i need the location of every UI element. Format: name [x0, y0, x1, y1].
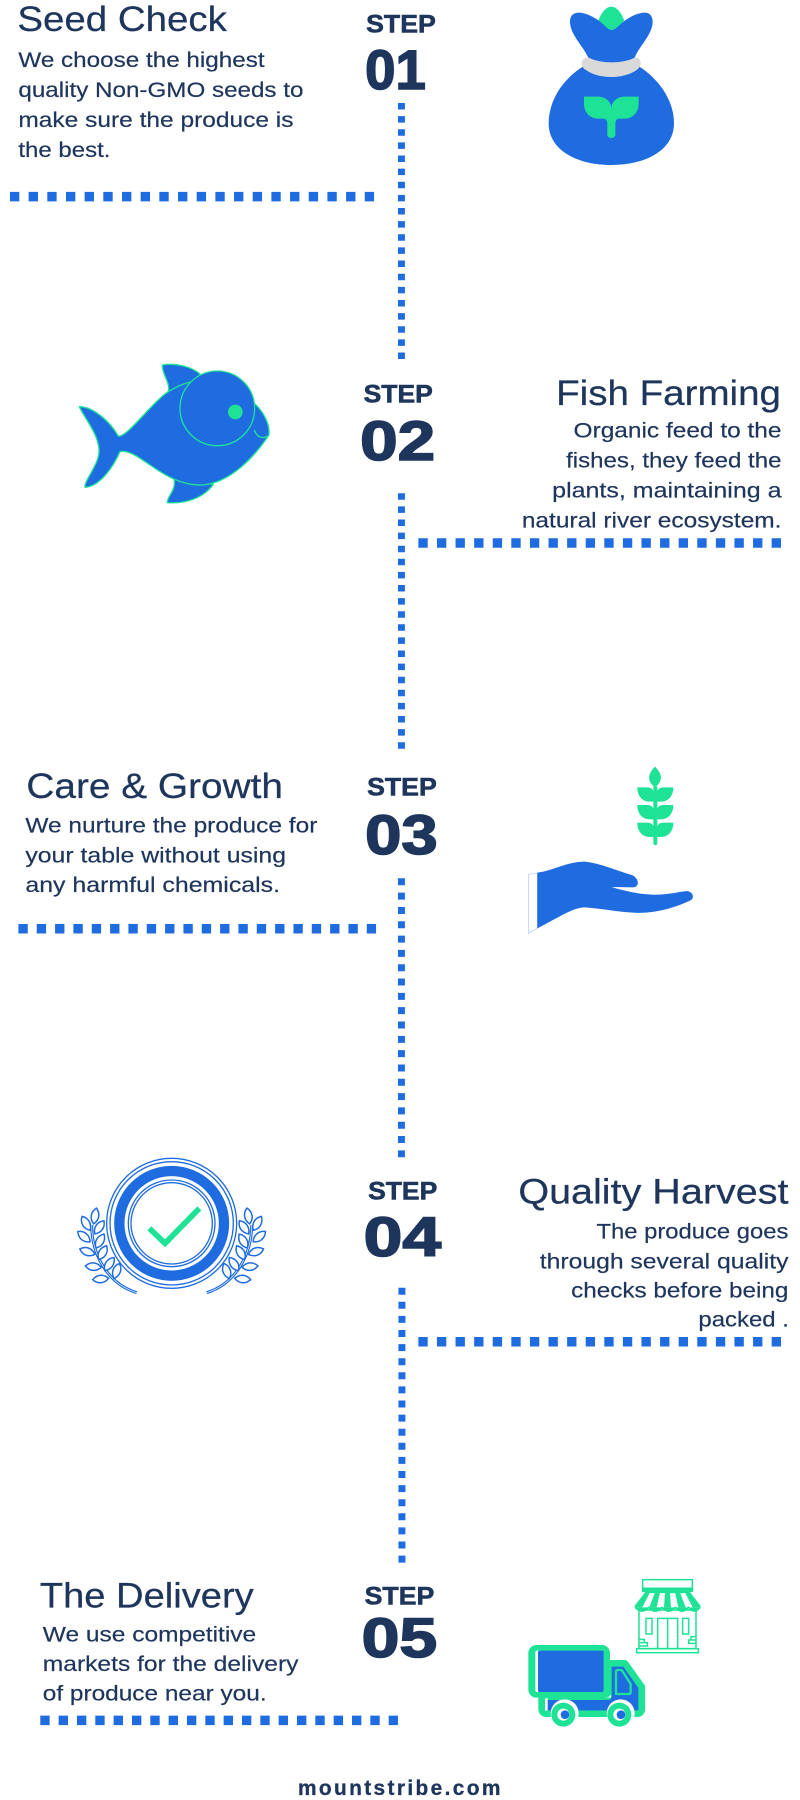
- text block: care and growth description: any harmful chemicals.: [25, 873, 280, 897]
- text block: care and growth description: your table without using: [25, 844, 286, 868]
- text block: care and growth description: We nurture the produce for: [25, 814, 317, 838]
- text block: care and growth description: [25, 814, 317, 897]
- text block: delivery description: We use competitive: [43, 1623, 256, 1647]
- truck: [542, 1663, 642, 1714]
- step label 03: STEP: [367, 773, 437, 801]
- footer: website: mountstribe.com: [298, 1777, 500, 1800]
- text block: seed check description: [18, 48, 304, 162]
- panel: step 1 seed check: [10, 0, 674, 359]
- panel: step 2 fish farming: [79, 364, 782, 749]
- text block: fish farming description: Organic feed to the: [574, 419, 781, 443]
- step label 02: STEP: [364, 381, 433, 409]
- vertical dotted connector 2: [398, 493, 405, 749]
- text block: quality harvest description: [540, 1219, 789, 1332]
- step label 01: STEP: [366, 10, 436, 39]
- text block: seed check description: quality Non-GMO seeds to: [18, 78, 304, 102]
- horizontal dotted rule under seed check: [10, 192, 374, 201]
- heading: Seed Check: Seed Check: [17, 0, 227, 39]
- step label 04: 04: [364, 1205, 441, 1268]
- heading: Care & Growth: Care & Growth: [26, 767, 283, 806]
- panel: step 5 the delivery: [40, 1577, 700, 1727]
- text block: seed check description: the best.: [18, 138, 110, 162]
- icon: delivery truck and storefront: [528, 1580, 700, 1727]
- step label 05: [362, 1583, 437, 1669]
- heading: Quality Harvest: Quality Harvest: [518, 1172, 789, 1211]
- text block: fish farming description: plants, maintaining a: [552, 479, 782, 503]
- panel: step 4 quality harvest: [75, 1158, 789, 1563]
- step label 05: 05: [362, 1606, 437, 1669]
- right laurel: [207, 1207, 268, 1293]
- step label 04: STEP: [368, 1177, 437, 1205]
- text block: quality harvest description: through several quality: [540, 1249, 789, 1273]
- text block: fish farming description: natural river ecosystem.: [522, 509, 781, 533]
- text block: quality harvest description: The produce goes: [596, 1219, 788, 1243]
- text block: quality harvest description: checks before being: [571, 1279, 788, 1303]
- text block: fish farming description: [522, 419, 782, 533]
- text block: quality harvest description: packed .: [698, 1308, 789, 1332]
- text block: seed check description: make sure the produce is: [18, 108, 293, 132]
- step label 05: STEP: [365, 1583, 434, 1611]
- vertical dotted connector 4: [398, 1288, 405, 1563]
- text block: seed check description: We choose the highest: [18, 48, 265, 72]
- text block: delivery description: [43, 1623, 299, 1706]
- step label 04: [364, 1177, 441, 1268]
- panel: step 3 care and growth: [18, 767, 693, 1157]
- storefront: [635, 1580, 700, 1653]
- horizontal dotted rule under fish farming: [418, 538, 781, 548]
- horizontal dotted rule under quality harvest: [418, 1337, 781, 1346]
- heading: Fish Farming: Fish Farming: [556, 374, 781, 413]
- text block: delivery description: markets for the delivery: [43, 1652, 299, 1676]
- horizontal dotted rule under delivery: [40, 1716, 398, 1725]
- step label 02: [360, 381, 435, 472]
- step label 01: 01: [365, 38, 426, 101]
- icon: fish: [79, 364, 269, 503]
- step label 03: [365, 773, 438, 866]
- icon: quality badge with laurels: [75, 1158, 268, 1293]
- step label 01: [365, 10, 436, 101]
- vertical dotted connector 3: [398, 878, 405, 1157]
- icon: seed bag: [549, 7, 674, 165]
- icon: hand holding wheat sprout: [528, 767, 693, 933]
- left laurel: [75, 1207, 137, 1293]
- vertical dotted connector 1: [398, 103, 405, 359]
- step label 02: 02: [360, 409, 435, 472]
- horizontal dotted rule under care and growth: [18, 924, 376, 933]
- text block: fish farming description: fishes, they feed the: [566, 449, 781, 473]
- step label 03: 03: [365, 803, 438, 866]
- heading: The Delivery: The Delivery: [40, 1577, 254, 1616]
- text block: delivery description: of produce near you.: [43, 1682, 267, 1706]
